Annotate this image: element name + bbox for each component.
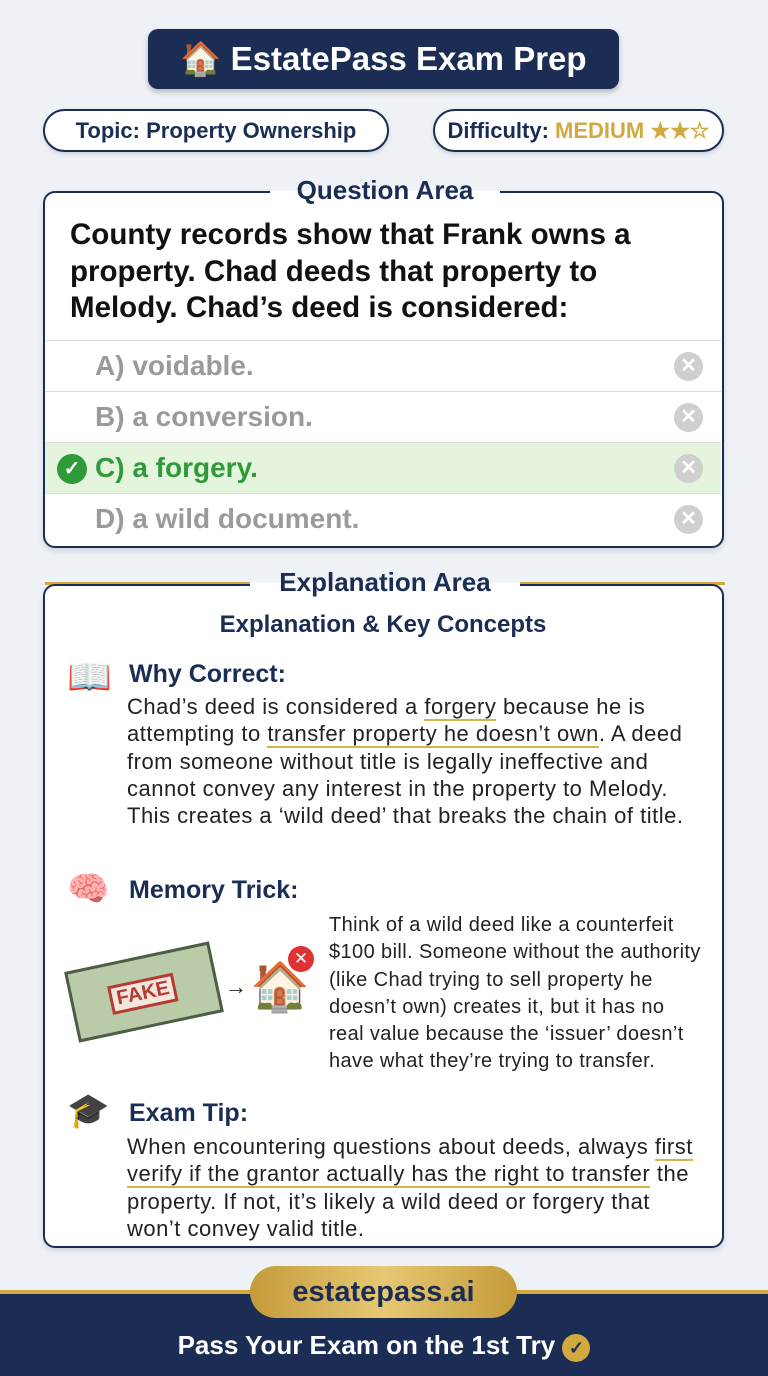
exam tip text: When encountering questions about deeds, always first: [127, 1134, 693, 1159]
option D: D) a wild document.: [95, 503, 359, 534]
question text: County records show that Frank owns a property. Chad deeds that property to Melody. Chad’s deed is considered:: [70, 218, 631, 324]
question panel: [43, 191, 724, 548]
subheading: Explanation & Key Concepts: [220, 611, 546, 638]
difficulty pill: Difficulty:: [447, 118, 549, 142]
option D: ✕: [680, 508, 697, 530]
option D: [45, 493, 721, 544]
exam tip text: verify if the grantor actually has the right to transfer the: [127, 1161, 689, 1186]
topic pill: [43, 109, 389, 152]
memory trick text: (like Chad trying to sell property he: [329, 969, 653, 991]
explanation heading: Explanation Area: [279, 567, 491, 597]
illustration: fake bill to house: [64, 941, 314, 1043]
illustration: fake bill to house: 🏠: [250, 961, 310, 1014]
option A: [45, 340, 721, 391]
option C correct: C) a forgery.: [95, 452, 258, 483]
why correct text: cannot convey any interest in the property to Melody.: [127, 776, 668, 801]
memory trick heading: Memory Trick:: [129, 876, 299, 904]
footer url pill: [250, 1266, 517, 1318]
memory trick text: [329, 914, 701, 1072]
memory trick text: real value because the ‘issuer’ doesn’t: [329, 1023, 684, 1045]
memory trick text: Think of a wild deed like a counterfeit: [329, 914, 674, 936]
question heading: Question Area: [297, 175, 473, 205]
footer: [0, 1290, 768, 1376]
option A: ✕: [680, 355, 697, 377]
explanation panel: [43, 584, 724, 1248]
why correct heading: Why Correct:: [129, 660, 286, 688]
why correct text: Chad’s deed is considered a forgery because he is: [127, 694, 645, 719]
illustration: fake bill to house: ✕: [294, 949, 308, 968]
option B: ✕: [680, 406, 697, 428]
illustration: fake bill to house: →: [225, 974, 247, 999]
option C correct: [45, 442, 721, 493]
option B: B) a conversion.: [95, 401, 313, 432]
memory trick text: $100 bill. Someone without the authority: [329, 941, 701, 963]
memory trick text: doesn’t own) creates it, but it has no: [329, 996, 664, 1018]
icon: brain: 🧠: [67, 870, 109, 908]
memory trick text: have what they’re trying to transfer.: [329, 1050, 655, 1072]
tagline: Pass Your Exam on the 1st Try: [178, 1330, 555, 1360]
illustration: fake bill to house: FAKE: [115, 977, 171, 1010]
icon: graduation cap: 🎓: [67, 1092, 109, 1130]
title: [148, 29, 619, 89]
exam tip text: [127, 1134, 693, 1241]
explanation heading lines: [45, 582, 250, 585]
why correct text: This creates a ‘wild deed’ that breaks the chain of title.: [127, 803, 683, 828]
topic pill: Topic: Property Ownership: [76, 118, 356, 142]
exam tip text: property. If not, it’s likely a wild deed or forgery that: [127, 1189, 650, 1214]
difficulty pill: MEDIUM ★★☆: [555, 118, 710, 142]
option C correct: ✓: [64, 458, 80, 480]
icon: book: 📖: [67, 656, 112, 697]
difficulty pill: [433, 109, 724, 152]
footer url pill: estatepass.ai: [292, 1276, 475, 1308]
why correct text: attempting to transfer property he doesn’t own. A deed: [127, 721, 682, 746]
option B: [45, 391, 721, 442]
title: 🏠 EstatePass Exam Prep: [180, 40, 587, 76]
exam tip text: won’t convey valid title.: [127, 1216, 364, 1241]
why correct text: [127, 694, 683, 828]
option C correct: ✕: [680, 457, 697, 479]
tagline: ✓: [569, 1338, 584, 1358]
exam tip heading: Exam Tip:: [129, 1099, 248, 1127]
why correct text: from someone without title is legally ineffective and: [127, 749, 648, 774]
option A: A) voidable.: [95, 350, 254, 381]
